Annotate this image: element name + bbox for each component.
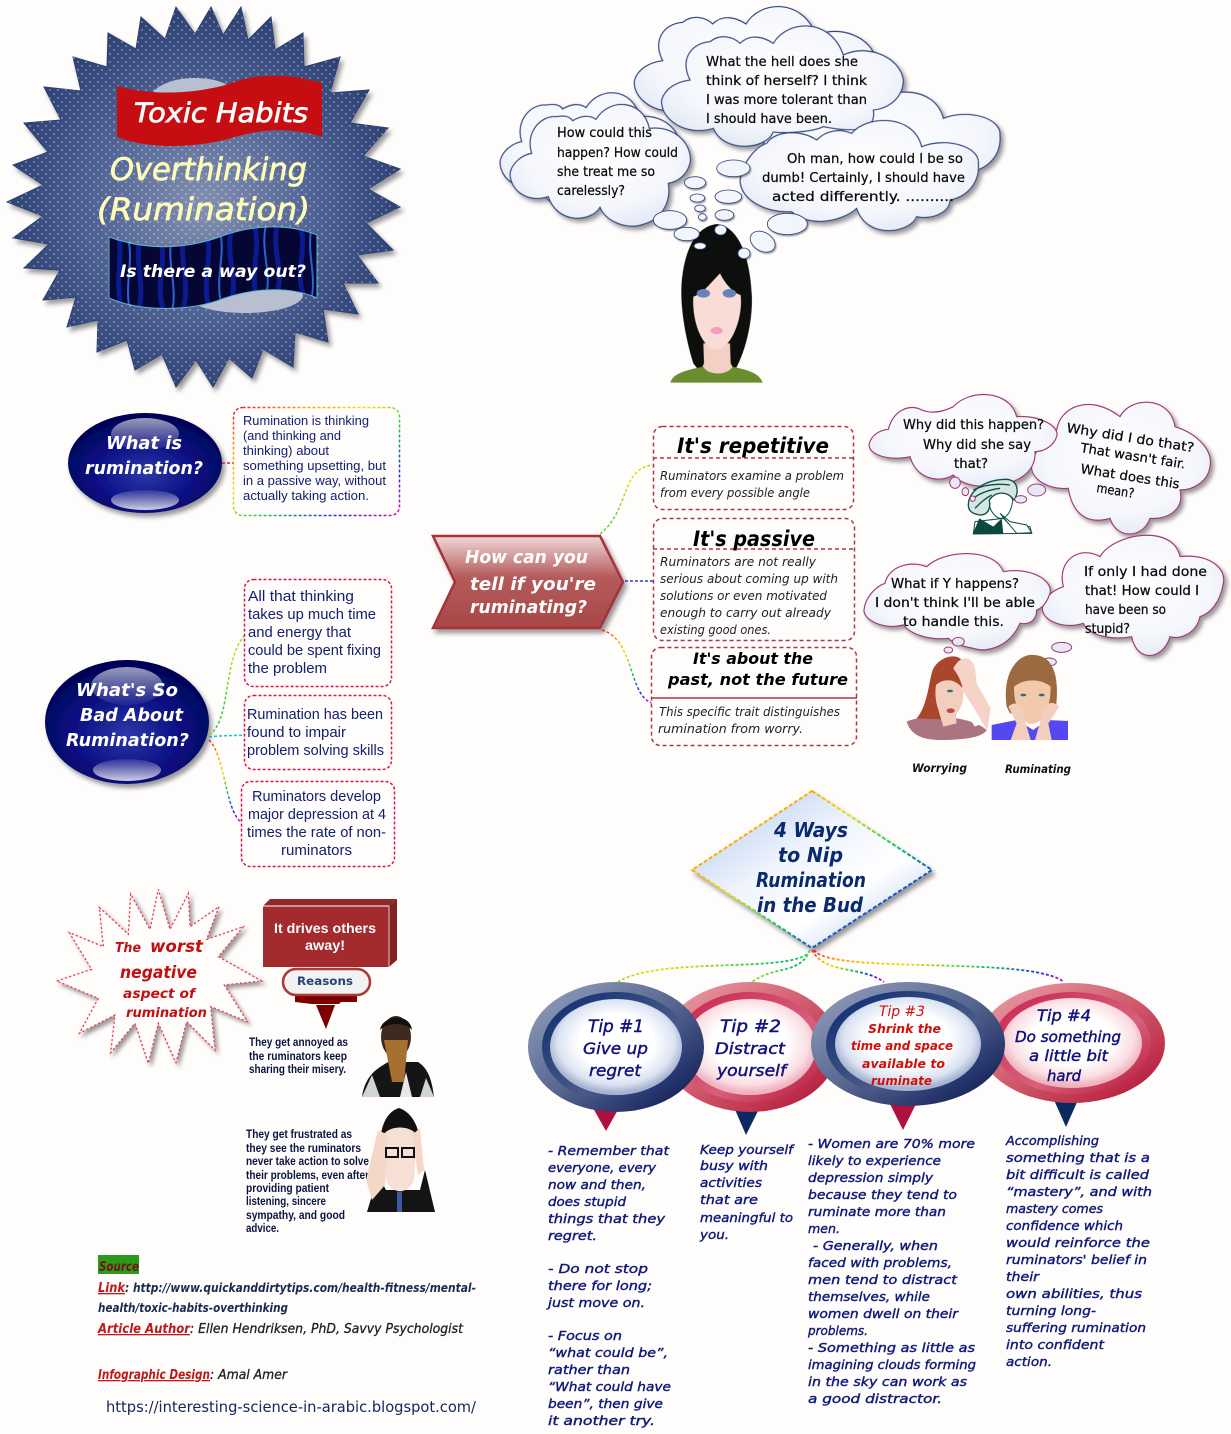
reason text 2: they see the ruminators bbox=[246, 1143, 361, 1155]
infographic design: Infographic Design bbox=[98, 1368, 210, 1383]
banner: Is there a way out: Is there a way out? bbox=[120, 262, 306, 282]
tip 4 text: Accomplishing bbox=[1005, 1133, 1099, 1148]
tip 4 ring bbox=[979, 983, 1165, 1127]
reason text 1: the ruminators keep bbox=[249, 1051, 347, 1063]
box: time and energy: could be spent fixing bbox=[248, 643, 381, 659]
cloud text: What the hell: think of herself? I think bbox=[706, 74, 867, 89]
box: depression: times the rate of non- bbox=[247, 825, 386, 841]
caption: Worrying: Worrying bbox=[912, 761, 967, 775]
tip 1 ring: Tip #1 bbox=[588, 1017, 644, 1037]
panel: the worst negative aspect bbox=[57, 889, 435, 1235]
reason text 1: They get annoyed as bbox=[249, 1037, 348, 1049]
title badge bbox=[7, 7, 400, 387]
cloud text: Oh man: dumb! Certainly, I should have bbox=[762, 171, 965, 186]
thought clouds with woman bbox=[500, 7, 1000, 383]
box: time and energy: the problem bbox=[248, 661, 327, 677]
cloud text: Why did I do that: That wasn't fair. bbox=[1078, 441, 1186, 473]
card: It's passive: solutions or even motivated bbox=[660, 589, 827, 603]
box: time and energy: All that thinking bbox=[248, 589, 354, 605]
tip 3 text: imagining clouds forming bbox=[808, 1357, 976, 1372]
tip 1 text: “what could be”, bbox=[548, 1345, 668, 1360]
chevron heading: tell if you're bbox=[470, 574, 596, 595]
tip 1 text: “What could have bbox=[548, 1379, 671, 1394]
definition box: thinking) about bbox=[243, 443, 329, 458]
tip 4 text: confidence which bbox=[1006, 1218, 1123, 1233]
oval heading: What is rumination: What is bbox=[106, 433, 182, 454]
burst text: rumination bbox=[126, 1006, 207, 1021]
tip 4 ring: Tip #4 bbox=[1037, 1006, 1091, 1025]
reason text 2: advice. bbox=[246, 1223, 279, 1235]
tip 4 ring: hard bbox=[1047, 1067, 1081, 1085]
tip 4 text bbox=[1005, 1133, 1152, 1369]
card: It's repetitive bbox=[653, 426, 854, 510]
photo: annoyed man bbox=[362, 1016, 434, 1097]
link line bbox=[98, 1281, 476, 1315]
pill: Reasons: Reasons bbox=[297, 974, 353, 988]
cloud text: Why did this happen bbox=[903, 418, 1044, 472]
card: It's passive: enough to carry out already bbox=[660, 606, 832, 620]
cloud text: What the hell: What the hell does she bbox=[706, 55, 858, 70]
blog url: https://interesting-science-in-arabic.blogspot.com/ bbox=[106, 1398, 477, 1416]
reason text 1: sharing their misery. bbox=[249, 1064, 346, 1076]
cloud text: If only: If only I had done bbox=[1084, 565, 1207, 580]
panel: what is rumination bbox=[68, 408, 400, 516]
cloud text: What the hell bbox=[706, 55, 867, 127]
card: about the past bbox=[651, 648, 857, 746]
definition box: something upsetting, but bbox=[243, 458, 386, 473]
burst text: negative bbox=[120, 963, 197, 983]
tip 3 text: themselves, while bbox=[808, 1289, 930, 1304]
tip 1 text: everyone, every bbox=[548, 1160, 657, 1175]
card: about the past: This specific trait distinguishes bbox=[659, 705, 840, 719]
cloud text: Why did I do that: mean? bbox=[1095, 481, 1135, 502]
cloud text: Oh man: Oh man, how could I be so bbox=[787, 152, 963, 167]
cloud text: What if Y happens bbox=[875, 577, 1035, 630]
tip 2 ring: yourself bbox=[716, 1061, 789, 1080]
panel: 4 ways to nip rumination bbox=[528, 791, 1165, 1428]
banner: Toxic Habits bbox=[117, 76, 322, 146]
cloud text: If only: stupid? bbox=[1085, 622, 1130, 637]
woman illustration bbox=[670, 224, 763, 383]
reason text 2: They get frustrated as bbox=[246, 1129, 352, 1141]
tip 4 text: suffering rumination bbox=[1006, 1320, 1146, 1335]
thought bubbles bbox=[653, 160, 807, 259]
tip 1 text: just move on. bbox=[546, 1295, 645, 1310]
reason text 2: listening, sincere bbox=[246, 1196, 326, 1208]
photo: frustrated man bbox=[366, 1108, 435, 1212]
oval heading: What is rumination: rumination? bbox=[85, 458, 203, 479]
tip 1 text bbox=[546, 1143, 671, 1428]
card: It's repetitive: Ruminators examine a problem bbox=[660, 469, 844, 483]
source credits bbox=[97, 1255, 477, 1416]
tip 4 text: own abilities, thus bbox=[1006, 1286, 1143, 1301]
burst text: The bbox=[115, 941, 141, 956]
tip 2 text: meaningful to bbox=[700, 1210, 793, 1225]
cloud text: Why did this happen: Why did she say bbox=[923, 438, 1031, 453]
connectors bbox=[600, 465, 655, 703]
tip 3 text bbox=[807, 1136, 976, 1406]
pill: Reasons bbox=[283, 969, 370, 1029]
banner: Is there a way out bbox=[109, 222, 317, 312]
cloud artwork bbox=[500, 7, 1000, 383]
tip 2 ring: Distract bbox=[715, 1039, 786, 1058]
heading: Rumination: (Rumination) bbox=[97, 192, 310, 228]
tip 2 text: busy with bbox=[700, 1158, 768, 1173]
tip 1 ring: regret bbox=[589, 1061, 642, 1080]
tip 1 ring: Give up bbox=[583, 1039, 648, 1058]
tip 1 text: things that they bbox=[548, 1211, 666, 1226]
definition box: actually taking action. bbox=[243, 488, 369, 503]
tip 3 text: depression simply bbox=[808, 1170, 934, 1185]
box: problem solving: found to impair bbox=[247, 725, 346, 741]
heading: Overthinking: Overthinking bbox=[110, 152, 307, 188]
box: problem solving: problem solving skills bbox=[247, 743, 384, 759]
box: time and energy: and energy that bbox=[248, 625, 351, 641]
box: depression: Ruminators develop bbox=[252, 789, 381, 805]
tip 3 text: men tend to distract bbox=[808, 1272, 958, 1287]
cloud text: What if Y happens: What if Y happens? bbox=[891, 577, 1019, 592]
tip 4 text: mastery comes bbox=[1006, 1201, 1103, 1216]
tip 1 text: - Do not stop bbox=[548, 1261, 648, 1276]
box: It drives others away: away! bbox=[305, 937, 345, 953]
tip 3 text: women dwell on their bbox=[808, 1306, 959, 1321]
tip 4 text: into confident bbox=[1006, 1337, 1105, 1352]
box: It drives others away: It drives others bbox=[274, 920, 376, 936]
panel: what's so bad about rumination bbox=[45, 580, 394, 866]
tip 4 text: would reinforce the bbox=[1006, 1235, 1150, 1250]
cloud text: What the hell: I should have been. bbox=[706, 112, 832, 127]
chevron heading bbox=[433, 536, 623, 628]
burst text bbox=[115, 937, 207, 1021]
box: depression bbox=[242, 782, 394, 866]
tip 1 text: been”, then give bbox=[548, 1396, 663, 1411]
reason text 2: their problems, even after bbox=[246, 1170, 369, 1182]
oval heading: What is rumination bbox=[68, 413, 222, 513]
source label: Source bbox=[99, 1260, 139, 1275]
tip 4 text: action. bbox=[1006, 1354, 1052, 1369]
ruminating person bbox=[992, 655, 1068, 740]
link line: : http://www.quickanddirtytips.com/health-fitness/mental- bbox=[125, 1281, 476, 1295]
cloud text: What if Y happens: I don't think I'll be able bbox=[875, 596, 1035, 611]
cloud text: How could this: How could this bbox=[557, 126, 652, 141]
tip 1 text: there for long; bbox=[548, 1278, 652, 1293]
worrying woman bbox=[907, 656, 991, 740]
tip 1 text: does stupid bbox=[548, 1194, 626, 1209]
reason text 1 bbox=[249, 1037, 348, 1076]
starburst badge bbox=[7, 7, 400, 387]
cloud text: Why did this happen: Why did this happen? bbox=[903, 418, 1044, 433]
tip 3 text: problems. bbox=[807, 1323, 868, 1338]
burst outline bbox=[57, 889, 262, 1063]
article author: Article Author bbox=[97, 1322, 191, 1337]
tip 4 text: bit difficult is called bbox=[1006, 1167, 1149, 1182]
card: It's passive: It's passive bbox=[693, 527, 815, 551]
caption: Ruminating: Ruminating bbox=[1005, 762, 1071, 776]
card: It's passive: Ruminators are not really bbox=[660, 555, 817, 569]
tip 4 text: turning long- bbox=[1006, 1303, 1097, 1318]
tip 3 ring: Tip #3 bbox=[879, 1004, 925, 1020]
card: about the past: rumination from worry. bbox=[658, 722, 803, 736]
card: It's passive: serious about coming up with bbox=[660, 572, 838, 586]
tip 4 ring: Do something bbox=[1015, 1028, 1121, 1046]
tip 4 ring: a little bit bbox=[1029, 1047, 1109, 1065]
reason text 2 bbox=[246, 1129, 369, 1235]
tip 1 ring bbox=[528, 982, 704, 1131]
reason text 2: never take action to solve bbox=[246, 1156, 369, 1168]
card: It's repetitive: from every possible angle bbox=[660, 486, 810, 500]
tip 1 text: now and then, bbox=[548, 1177, 646, 1192]
tip 1 text: - Remember that bbox=[548, 1143, 670, 1158]
cloud text: Why did I do that: Why did I do that? bbox=[1065, 421, 1195, 456]
connectors bbox=[209, 635, 245, 822]
tip 2 text: Keep yourself bbox=[700, 1142, 795, 1157]
tip 3 text: because they tend to bbox=[808, 1187, 957, 1202]
tip 2 text: activities bbox=[700, 1175, 763, 1190]
bubbles bbox=[944, 477, 1072, 675]
card: about the past: past, not the future bbox=[667, 670, 848, 689]
definition box: Rumination is thinking bbox=[243, 413, 369, 428]
banner: Toxic Habits: Toxic Habits bbox=[134, 98, 308, 129]
box: depression: ruminators bbox=[281, 843, 352, 859]
cloud text: If only bbox=[1084, 565, 1207, 637]
card: It's passive bbox=[653, 518, 855, 640]
cloud text: How could this bbox=[557, 126, 678, 199]
oval heading: What's So Bad: Bad About bbox=[80, 705, 184, 726]
box: depression: major depression at 4 bbox=[248, 807, 386, 823]
cloud text: How could this: she treat me so bbox=[557, 165, 655, 180]
tip 3 text: likely to experience bbox=[808, 1153, 941, 1168]
cloud text: What if Y happens: to handle this. bbox=[903, 615, 1004, 630]
tip 3 text: ruminate more than bbox=[808, 1204, 946, 1219]
chevron heading: ruminating? bbox=[470, 597, 587, 618]
tip 3 ring: time and space bbox=[851, 1038, 953, 1053]
tip 2 text: you. bbox=[699, 1227, 729, 1242]
burst text: worst bbox=[150, 937, 204, 957]
tip 1 text: rather than bbox=[548, 1362, 630, 1377]
burst text: aspect of bbox=[123, 987, 197, 1002]
infographic design: : Amal Amer bbox=[210, 1368, 289, 1383]
tip 3 text: in the sky can work as bbox=[808, 1374, 968, 1389]
tip 4 text: their bbox=[1006, 1269, 1040, 1284]
diamond heading: 4 Ways bbox=[773, 818, 848, 842]
reason text 2: sympathy, and good bbox=[246, 1210, 345, 1222]
connectors bbox=[618, 950, 1064, 982]
cloud text: If only: have been so bbox=[1085, 603, 1166, 618]
tip 3 ring: Shrink the bbox=[868, 1021, 941, 1036]
tip 3 ring: available to bbox=[862, 1056, 945, 1071]
cloud text: Oh man bbox=[762, 152, 965, 205]
link line: Link bbox=[98, 1281, 126, 1296]
tip 3 text: - Women are 70% more bbox=[808, 1136, 975, 1151]
card: It's repetitive: It's repetitive bbox=[677, 434, 829, 458]
cloud text: Why did I do that: What does this bbox=[1079, 462, 1181, 493]
cloud text: Why did this happen: that? bbox=[954, 457, 988, 472]
tip 1 text: - Focus on bbox=[548, 1328, 622, 1343]
box: problem solving: Rumination has been bbox=[247, 707, 383, 723]
tip 3 text: faced with problems, bbox=[808, 1255, 952, 1270]
article author: : Ellen Hendriksen, PhD, Savvy Psychologist bbox=[190, 1322, 464, 1337]
reason text 2: providing patient bbox=[246, 1183, 329, 1195]
tip 4 text: “mastery”, and with bbox=[1006, 1184, 1152, 1199]
source label bbox=[98, 1255, 139, 1275]
cloud text: If only: that! How could I bbox=[1085, 584, 1199, 599]
oval heading: What's So Bad: What's So bbox=[76, 680, 178, 701]
clouds and figures bbox=[864, 395, 1224, 740]
cloud text: Oh man: acted differently. .......... bbox=[772, 190, 954, 205]
tip 1 text: regret. bbox=[548, 1228, 597, 1243]
definition box: in a passive way, without bbox=[243, 473, 386, 488]
cloud text: How could this: carelessly? bbox=[557, 184, 625, 199]
tip 2 text bbox=[699, 1142, 795, 1242]
tip 3 text: - Generally, when bbox=[813, 1238, 938, 1253]
box: problem solving bbox=[244, 696, 392, 770]
definition box bbox=[234, 408, 400, 516]
tip 4 text: ruminators' belief in bbox=[1006, 1252, 1147, 1267]
cloud text: What the hell: I was more tolerant than bbox=[706, 93, 867, 108]
cloud text: How could this: happen? How could bbox=[557, 146, 678, 161]
definition box: (and thinking and bbox=[243, 428, 341, 443]
tip 2 ring: Tip #2 bbox=[720, 1017, 781, 1037]
oval heading: What's So Bad bbox=[45, 660, 209, 784]
diamond heading: Rumination bbox=[756, 868, 866, 892]
card: It's passive: existing good ones. bbox=[660, 623, 771, 637]
link line: health/toxic-habits-overthinking bbox=[98, 1301, 288, 1315]
connector bbox=[222, 462, 233, 464]
diamond heading: in the Bud bbox=[757, 893, 864, 917]
box: It drives others away bbox=[263, 899, 397, 967]
diamond heading bbox=[692, 791, 932, 948]
tip 2 ring bbox=[662, 982, 838, 1135]
vintage woman bbox=[968, 479, 1032, 534]
tip 3 ring: ruminate bbox=[871, 1073, 932, 1088]
diamond heading: to Nip bbox=[778, 843, 843, 867]
card: about the past: It's about the bbox=[693, 649, 813, 668]
tip 4 text: something that is a bbox=[1006, 1150, 1150, 1165]
tip 3 ring bbox=[811, 982, 1005, 1130]
panel: how can you tell bbox=[433, 426, 857, 746]
chevron heading: How can you bbox=[465, 547, 588, 568]
tip 3 text: a good distractor. bbox=[808, 1391, 942, 1406]
cloud text: Why did I do that bbox=[1065, 421, 1195, 502]
tip 3 text: - Something as little as bbox=[808, 1340, 976, 1355]
tip 2 text: that are bbox=[700, 1192, 758, 1207]
tip 1 text: it another try. bbox=[548, 1413, 655, 1428]
tip 3 text: men. bbox=[808, 1221, 840, 1236]
box: time and energy bbox=[244, 580, 392, 686]
oval heading: What's So Bad: Rumination? bbox=[66, 730, 189, 751]
box: time and energy: takes up much time bbox=[248, 607, 376, 623]
panel: worry vs rumination bbox=[864, 395, 1224, 776]
